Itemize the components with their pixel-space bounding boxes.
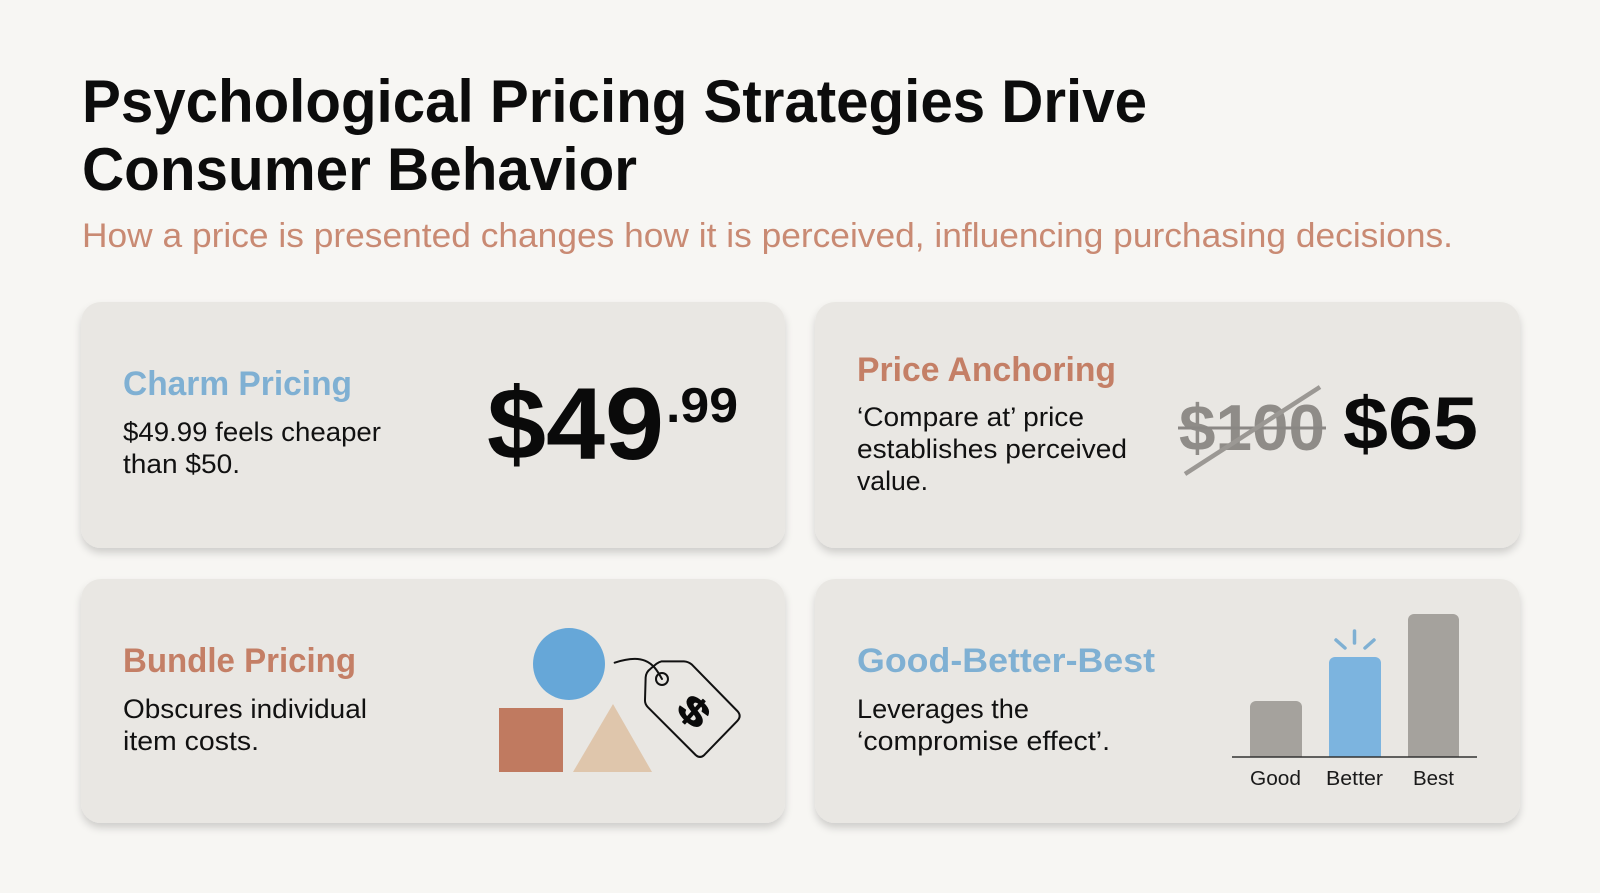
title — [82, 68, 1147, 203]
title: Psychological Pricing Strategies Drive — [82, 68, 1147, 135]
bundle pricing description: item costs. — [123, 726, 259, 756]
panel: charm pricing — [81, 302, 785, 548]
bar labels — [1250, 768, 1454, 790]
icon: terracotta square — [499, 708, 563, 772]
icon: price tag: $ — [669, 686, 719, 737]
icon: blue circle — [533, 628, 605, 700]
icon: tan triangle — [573, 704, 652, 772]
panel: good-better-best — [815, 579, 1520, 823]
price anchoring description — [857, 402, 1127, 496]
panel: bundle pricing — [81, 579, 785, 823]
crossed out old price: $100 — [1179, 391, 1325, 464]
bar: best — [1408, 614, 1459, 757]
bar labels: Best — [1413, 768, 1454, 790]
bundle pricing description — [123, 694, 367, 756]
panel: price anchoring — [815, 302, 1520, 548]
charm price figure: .99 — [666, 379, 738, 433]
charm pricing description: $49.99 feels cheaper — [123, 417, 381, 447]
charm pricing description: than $50. — [123, 449, 240, 479]
bar labels: Better — [1326, 768, 1383, 790]
bundle pricing heading: Bundle Pricing — [123, 642, 356, 680]
new price: $65 — [1343, 382, 1478, 465]
good-better-best description: ‘compromise effect’. — [857, 726, 1110, 756]
charm pricing description — [123, 417, 381, 479]
title: Consumer Behavior — [82, 136, 637, 203]
subtitle: How a price is presented changes how it is perceived, influencing purchasing decisions. — [82, 217, 1453, 255]
price anchoring description: ‘Compare at’ price — [857, 402, 1084, 432]
charm pricing heading: Charm Pricing — [123, 365, 352, 403]
good-better-best heading: Good-Better-Best — [857, 642, 1155, 680]
bar labels: Good — [1250, 768, 1301, 790]
highlight rays — [1336, 631, 1374, 648]
bar chart — [1232, 614, 1477, 790]
bar: good — [1250, 701, 1302, 757]
bar: better — [1329, 657, 1381, 757]
price anchoring description: value. — [857, 466, 928, 496]
price anchoring heading: Price Anchoring — [857, 351, 1116, 389]
good-better-best description — [857, 694, 1110, 756]
bundle pricing description: Obscures individual — [123, 694, 367, 724]
good-better-best description: Leverages the — [857, 694, 1029, 724]
charm price figure: $49 — [487, 367, 664, 481]
price anchoring description: establishes perceived — [857, 434, 1127, 464]
charm price figure — [487, 367, 738, 481]
icon: price tag — [615, 659, 740, 757]
